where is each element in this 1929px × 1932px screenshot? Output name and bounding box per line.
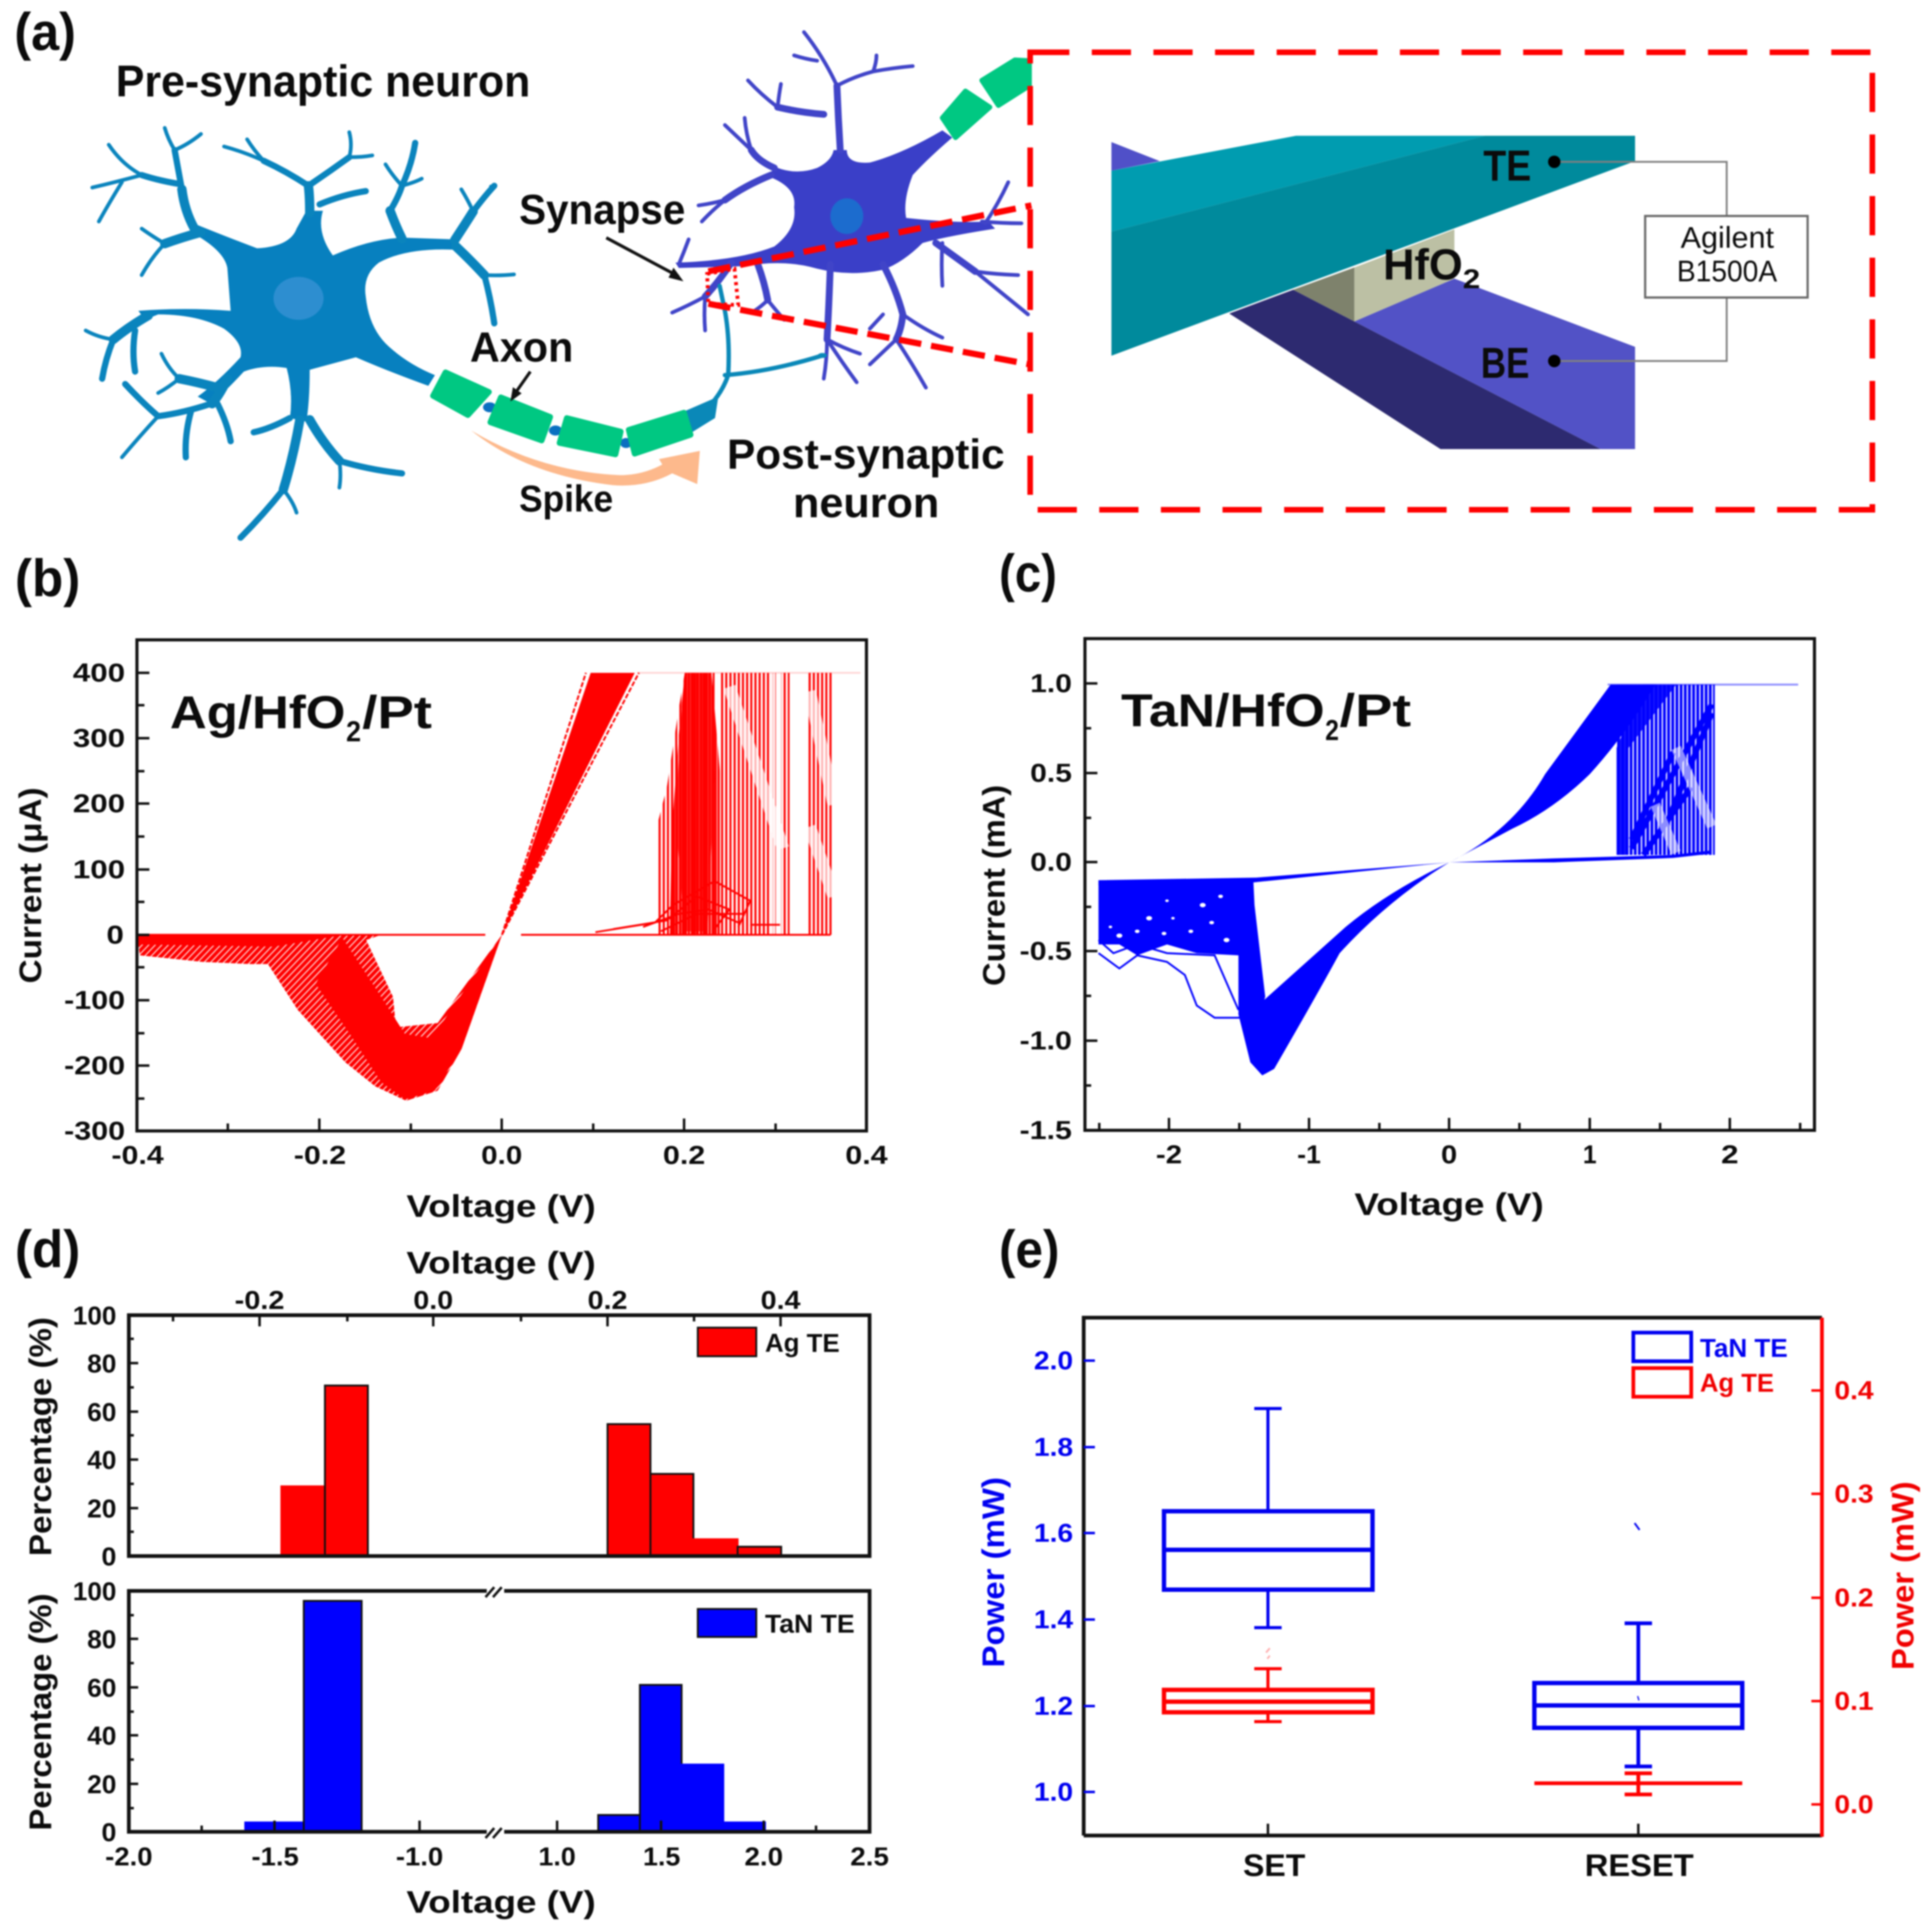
panel b: Ag/HfO2/Pt I-V curves (13, 549, 888, 1224)
y axis tick labels: 300 (73, 723, 125, 753)
top electrode (1112, 136, 1635, 356)
x axis tick labels: -0.4 (111, 1140, 164, 1170)
right axis labels (1834, 1376, 1874, 1819)
top x axis title: Voltage (V) (406, 1245, 596, 1280)
y axis labels: TaN TE (73, 1577, 116, 1847)
panel a: neuron schematic and device (14, 2, 1872, 538)
dashed device inset frame (1030, 52, 1872, 510)
bottom x axis tick labels: 1.0 (538, 1842, 576, 1871)
axis break marks (486, 1586, 504, 1838)
left axis labels: 1.0 (1034, 1777, 1073, 1806)
left axis labels: 2.0 (1034, 1346, 1073, 1375)
zoom lines from synapse to device (708, 205, 1031, 364)
y axis tick labels: 200 (73, 789, 125, 818)
label: post-synaptic neuron: neuron (793, 479, 939, 527)
ticks: TaN TE (129, 1615, 816, 1832)
y axis title: Current (mA) (977, 785, 1011, 986)
left axis labels: 1.8 (1034, 1432, 1073, 1461)
right axis labels: 0.2 (1834, 1583, 1874, 1612)
box plot: SET TaN (1164, 1409, 1373, 1628)
y axis tick labels (64, 658, 125, 1145)
y axis tick labels (1020, 668, 1072, 1145)
box plot: RESET TaN (1534, 1523, 1742, 1766)
left axis labels (1034, 1346, 1074, 1806)
axes frame (1084, 1318, 1822, 1837)
measurement wiring (1554, 162, 1727, 361)
y axis labels: TaN TE: 100 (73, 1577, 116, 1606)
label: HfO2: 2 (1463, 264, 1480, 294)
x axis tick labels: -2 (1156, 1140, 1182, 1169)
y axis tick labels: 0.0 (1030, 847, 1072, 876)
instrument box: Agilent B1500A: B1500A (1677, 255, 1777, 288)
left axis labels: 1.2 (1034, 1691, 1073, 1720)
x axis tick labels (111, 1140, 888, 1170)
left axis labels: 1.6 (1034, 1518, 1073, 1547)
axes frame: Ag TE (129, 1315, 870, 1556)
y axis tick labels: 0 (106, 920, 124, 949)
histogram: Ag TE bars (281, 1386, 781, 1556)
left axis ticks (1084, 1361, 1095, 1792)
chart: blue I-V sweep curves (1099, 685, 1798, 1076)
x axis tick labels: 0.4 (845, 1140, 888, 1170)
y axis tick labels: -100 (64, 985, 125, 1015)
contact dots (1548, 156, 1561, 367)
category labels (1243, 1848, 1694, 1883)
label: spike: Spike (519, 478, 613, 520)
axon with myelin sheath (433, 286, 827, 454)
x axis tick labels: -1 (1297, 1140, 1321, 1169)
chart title: Ag/HfO2/Pt: Ag/HfO (170, 687, 345, 738)
y axis title: Ag TE: Percentage (%) (23, 1317, 58, 1556)
x axis tick labels: -0.2 (294, 1140, 346, 1170)
y axis tick labels: -300 (64, 1116, 125, 1145)
x axis tick labels: 2 (1721, 1140, 1739, 1169)
bottom x axis tick labels: -2.0 (105, 1842, 153, 1871)
top x axis tick labels: 0.0 (413, 1285, 453, 1315)
top x axis tick labels (235, 1285, 801, 1315)
legend: TaN TE (1633, 1333, 1788, 1362)
nucleus: pre-synaptic (273, 277, 324, 320)
panel e: power box plots (976, 1220, 1920, 1883)
y axis labels: Ag TE: 60 (87, 1397, 116, 1427)
histogram: TaN TE bars (245, 1601, 765, 1832)
panel label c: (c) (999, 544, 1057, 603)
legend: Ag TE (1633, 1368, 1774, 1397)
chart title: Ag/HfO2/Pt: 2 (346, 715, 361, 748)
y axis labels: Ag TE: 0 (101, 1542, 116, 1571)
legend: Ag TE (698, 1328, 840, 1358)
x axis title: Voltage (V) (1354, 1187, 1544, 1222)
y axis labels: TaN TE: 60 (87, 1673, 116, 1702)
top x axis tick labels: 0.2 (588, 1285, 627, 1315)
bottom x axis title: Voltage (V) (406, 1885, 596, 1920)
top x axis tick labels: 0.4 (761, 1285, 801, 1315)
bottom electrode (1229, 279, 1635, 449)
bottom x axis tick labels: 2.0 (744, 1842, 783, 1871)
HfO2 layer (1293, 230, 1455, 321)
y axis labels: TaN TE: 20 (87, 1770, 116, 1799)
tick marks (1085, 683, 1800, 1130)
label: TE: TE (1483, 141, 1531, 190)
x axis tick labels: 0.0 (481, 1140, 522, 1170)
chart title: TaN/HfO2/Pt: /Pt (1340, 685, 1411, 736)
left axis title: Power (mW) (976, 1477, 1011, 1667)
top x axis tick labels: -0.2 (235, 1285, 284, 1315)
axes frame: TaN TE (129, 1591, 870, 1832)
panel label a: (a) (14, 2, 76, 61)
legend: TaN TE: TaN TE (1700, 1333, 1788, 1362)
chart title: Ag/HfO2/Pt (170, 687, 432, 748)
right axis title: Power (mW) (1885, 1481, 1920, 1670)
legend: Ag TE: Ag TE (1700, 1368, 1774, 1397)
synapse marker: dotted red outline (707, 269, 738, 305)
label: HfO2: HfO (1383, 240, 1463, 289)
chart title: TaN/HfO2/Pt (1121, 685, 1411, 746)
x axis tick labels: 1 (1583, 1140, 1597, 1169)
panel c: TaN/HfO2/Pt I-V curves (977, 544, 1814, 1222)
bottom x axis tick labels (105, 1842, 889, 1871)
panel label d: (d) (15, 1220, 80, 1278)
y axis labels: Ag TE: 40 (87, 1445, 116, 1475)
y axis labels: TaN TE: 40 (87, 1721, 116, 1750)
box plot: SET Ag (1164, 1648, 1373, 1722)
y axis labels: Ag TE: 100 (73, 1301, 116, 1330)
instrument box: Agilent B1500A (1645, 216, 1808, 298)
y axis tick labels: -0.5 (1020, 936, 1072, 965)
y axis labels: Ag TE: 80 (87, 1349, 116, 1378)
y axis title: TaN TE: Percentage (%) (23, 1593, 58, 1831)
arrow: synapse pointer (606, 238, 683, 281)
legend: Ag TE: Ag TE (765, 1328, 840, 1358)
device: crossbar memristor structure (1112, 136, 1635, 449)
right axis labels: 0.1 (1834, 1686, 1874, 1715)
right axis labels: 0.3 (1834, 1479, 1874, 1508)
y axis title: Current (μA) (13, 787, 48, 983)
axes frame (137, 640, 866, 1131)
ticks: Ag TE (129, 1315, 781, 1532)
right axis labels: 0.0 (1834, 1789, 1874, 1819)
box plot: RESET Ag (1534, 1773, 1742, 1794)
axes frame (1085, 639, 1814, 1130)
bottom x axis tick labels: 1.5 (643, 1842, 680, 1871)
illustration: pre-synaptic neuron (86, 128, 514, 538)
y axis labels: TaN TE: 0 (101, 1817, 116, 1847)
panel d: voltage histograms (15, 1220, 889, 1920)
x axis tick labels: 0 (1441, 1140, 1457, 1169)
legend: TaN TE: TaN TE (765, 1609, 855, 1638)
bottom x axis tick labels: -1.0 (396, 1842, 443, 1871)
y axis tick labels: 0.5 (1030, 758, 1072, 787)
illustration: post-synaptic neuron (672, 32, 1030, 388)
label: post-synaptic neuron: Post-synaptic (727, 431, 1005, 478)
y axis tick labels: 400 (73, 658, 125, 687)
chart title: TaN/HfO2/Pt: TaN/HfO (1121, 685, 1325, 736)
nucleus: post-synaptic (830, 199, 863, 234)
y axis tick labels: -200 (64, 1051, 125, 1080)
x axis ticks (1268, 1824, 1638, 1836)
category labels: RESET (1585, 1848, 1694, 1883)
right axis ticks (1811, 1390, 1822, 1804)
x axis tick labels (1156, 1140, 1739, 1169)
panel label b: (b) (15, 549, 80, 607)
chart: red I-V sweep curves (137, 673, 860, 1100)
category labels: SET (1243, 1848, 1305, 1883)
label: BE: BE (1481, 339, 1529, 387)
panel label e: (e) (999, 1220, 1059, 1278)
label: post-synaptic neuron (727, 431, 1005, 527)
label: axon: Axon (470, 324, 573, 371)
bottom x axis tick labels: 2.5 (850, 1842, 889, 1871)
right axis labels: 0.4 (1834, 1376, 1874, 1405)
chart title: TaN/HfO2/Pt: 2 (1325, 714, 1339, 746)
x axis title: Voltage (V) (406, 1189, 596, 1224)
y axis tick labels: -1.0 (1020, 1026, 1072, 1055)
left axis labels: 1.4 (1034, 1605, 1074, 1634)
heading: pre-synaptic neuron: Pre-synaptic neuron (116, 57, 530, 106)
bottom x axis tick labels: -1.5 (251, 1842, 299, 1871)
tick marks (137, 673, 776, 1131)
arrow: axon pointer (510, 372, 530, 401)
chart title: Ag/HfO2/Pt: /Pt (362, 687, 432, 738)
post-synaptic myelin segments (942, 60, 1030, 138)
instrument box: Agilent B1500A: Agilent (1681, 222, 1774, 255)
y axis labels: Ag TE: 20 (87, 1494, 116, 1523)
y axis labels: TaN TE: 80 (87, 1625, 116, 1654)
label: synapse: Synapse (519, 186, 685, 233)
y axis tick labels: 100 (73, 855, 125, 884)
y axis labels: Ag TE (73, 1301, 116, 1571)
y axis tick labels: 1.0 (1030, 668, 1072, 698)
x axis tick labels: 0.2 (663, 1140, 705, 1170)
arrow: spike direction (471, 431, 700, 485)
y axis tick labels: -1.5 (1020, 1115, 1072, 1145)
legend: TaN TE (698, 1609, 855, 1638)
